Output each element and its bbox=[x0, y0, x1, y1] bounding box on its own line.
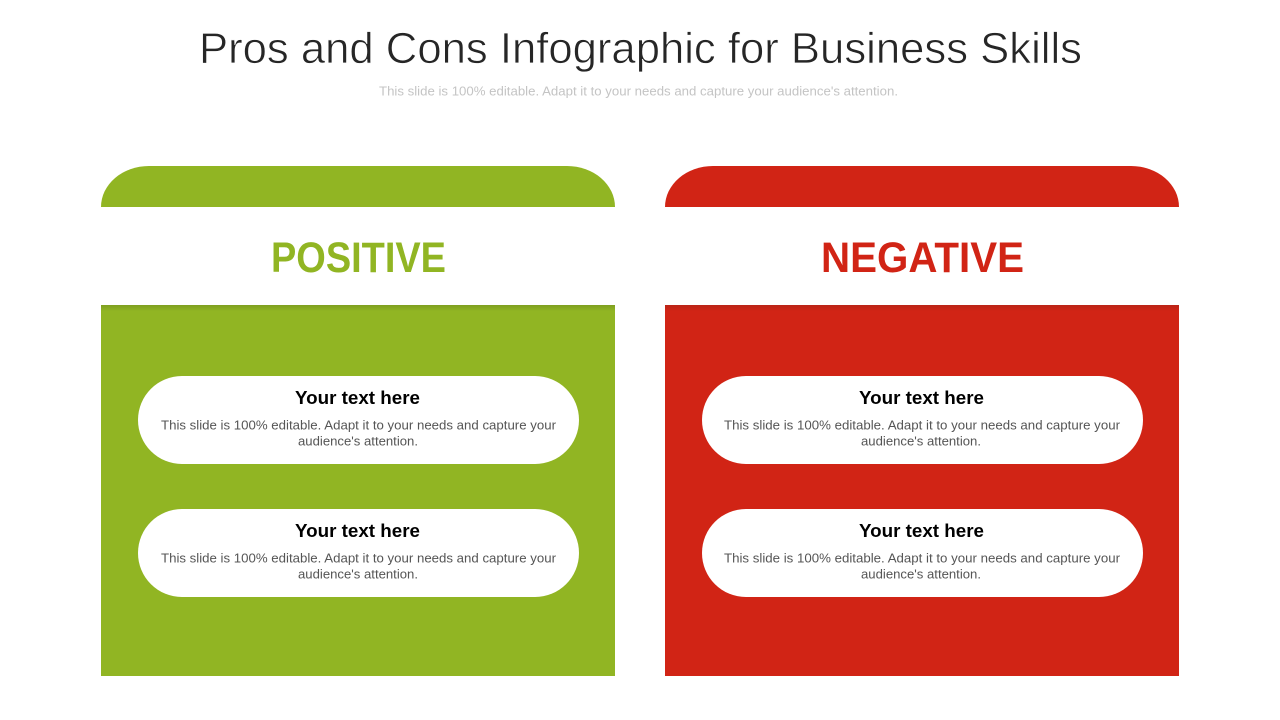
title: Pros and Cons Infographic for Business Skills bbox=[199, 24, 1082, 73]
negative card 2: Your text here bbox=[859, 521, 984, 541]
negative card 2: audience's attention. bbox=[861, 568, 981, 582]
negative card 2: This slide is 100% editable. Adapt it to your needs and capture your bbox=[724, 552, 1120, 566]
positive card 1: This slide is 100% editable. Adapt it to your needs and capture your bbox=[161, 418, 556, 432]
positive card 1: Your text here bbox=[295, 388, 420, 408]
positive heading: POSITIVE bbox=[271, 234, 446, 282]
negative card 1 bbox=[702, 376, 1143, 464]
positive card 2: This slide is 100% editable. Adapt it to your needs and capture your bbox=[161, 552, 556, 566]
positive body panel bbox=[101, 305, 615, 676]
negative card 1: Your text here bbox=[859, 388, 984, 408]
positive card 2 bbox=[138, 509, 579, 597]
negative header tab bbox=[665, 166, 1179, 207]
positive card 2: Your text here bbox=[295, 521, 420, 541]
positive header tab bbox=[101, 166, 615, 207]
negative body panel bbox=[665, 305, 1179, 676]
negative heading: NEGATIVE bbox=[821, 234, 1024, 282]
positive card 1: audience's attention. bbox=[298, 434, 418, 448]
panel: negative bbox=[665, 166, 1179, 676]
positive card 1 bbox=[138, 376, 579, 464]
negative card 1: audience's attention. bbox=[861, 434, 981, 448]
negative card 2 bbox=[702, 509, 1143, 597]
panel: positive bbox=[101, 166, 615, 676]
positive card 2: audience's attention. bbox=[298, 568, 418, 582]
negative card 1: This slide is 100% editable. Adapt it to your needs and capture your bbox=[724, 418, 1120, 432]
subtitle: This slide is 100% editable. Adapt it to your needs and capture your audience's attention. bbox=[379, 84, 898, 98]
